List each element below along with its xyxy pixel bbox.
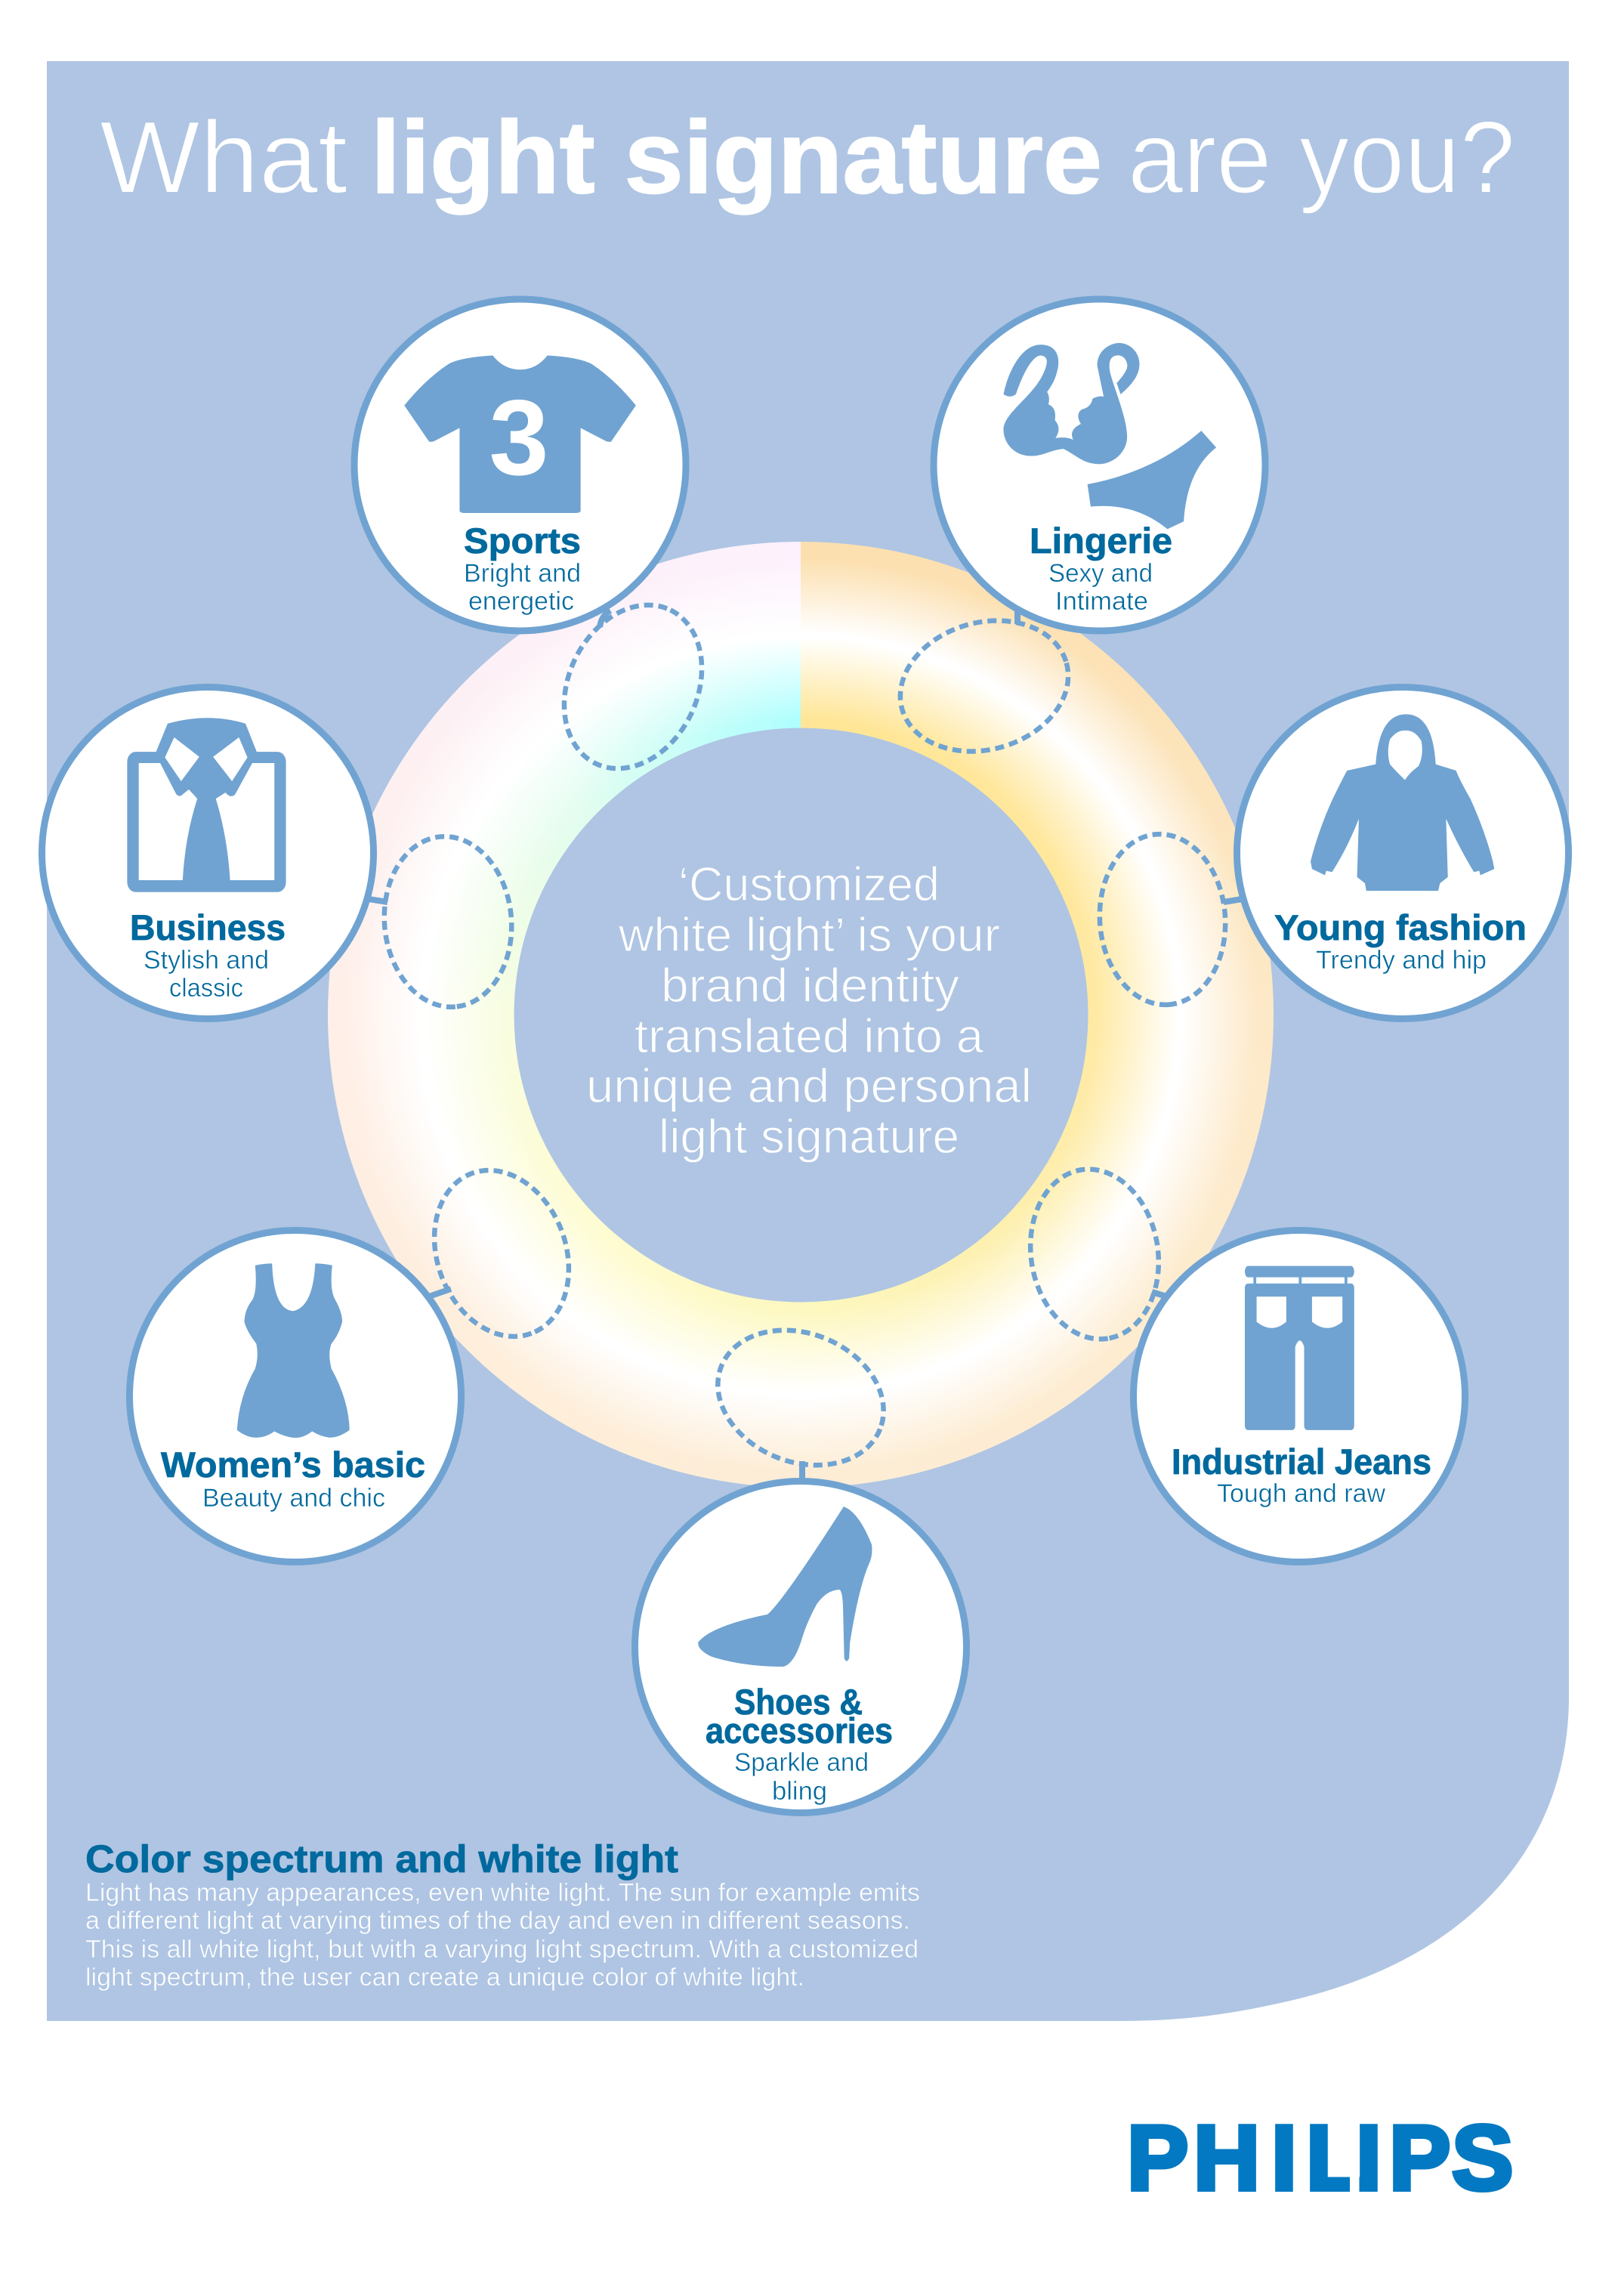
chart: spectrum ring <box>328 542 1274 1485</box>
label: industrial jeans: Industrial Jeans <box>1172 1442 1431 1482</box>
label: business: classic <box>169 974 243 1003</box>
ring centre hole <box>514 728 1088 1303</box>
label: young fashion <box>1274 907 1527 975</box>
label: shoes and accessories: accessories <box>706 1710 893 1751</box>
panel: shoes and accessories <box>635 1481 967 1813</box>
label: shoes and accessories: bling <box>772 1777 827 1806</box>
icon: jeans <box>1245 1266 1354 1430</box>
icon: hoodie <box>1311 714 1494 891</box>
label: shoes and accessories: Shoes & <box>734 1682 863 1722</box>
panel: industrial jeans <box>1133 1230 1465 1562</box>
text block: color spectrum and white light: Color spectrum and white light <box>85 1837 678 1880</box>
title <box>100 100 1515 215</box>
text block: color spectrum and white light <box>85 1837 920 1991</box>
centre statement: unique and personal <box>586 1060 1032 1113</box>
label: lingerie: Intimate <box>1055 587 1148 616</box>
label: young fashion: Trendy and hip <box>1316 946 1487 975</box>
label: business: Business <box>130 907 286 947</box>
centre statement: translated into a <box>635 1010 984 1063</box>
panel: business <box>42 688 373 1018</box>
label: sports: Sports <box>464 521 581 561</box>
text block: color spectrum and white light: This is all white light, but with a varying light spectrum. With a customized <box>85 1935 919 1963</box>
centre statement: white light’ is your <box>618 909 1000 962</box>
label: lingerie: Sexy and <box>1048 559 1153 588</box>
label: shoes and accessories <box>706 1682 893 1806</box>
icon: shirt and tie <box>127 718 286 892</box>
centre statement <box>586 858 1032 1163</box>
label: sports <box>464 521 581 616</box>
icon: lingerie <box>1003 343 1216 529</box>
dashed zones on the ring <box>377 582 1231 1489</box>
text block: color spectrum and white light: a different light at varying times of the day and even in different seasons. <box>85 1906 910 1934</box>
panel: sports <box>354 299 686 631</box>
centre statement: light signature <box>659 1111 959 1163</box>
connectors between circles and zones <box>369 610 1242 1479</box>
label: women's basic: Women’s basic <box>161 1445 425 1485</box>
label: lingerie <box>1030 521 1172 616</box>
label: business: Stylish and <box>144 946 269 975</box>
label: business <box>130 907 286 1003</box>
text block: color spectrum and white light: light spectrum, the user can create a unique color of white light. <box>85 1963 804 1991</box>
label: sports: Bright and <box>464 559 581 588</box>
label: industrial jeans: Tough and raw <box>1217 1479 1385 1508</box>
icon: dress <box>237 1263 350 1438</box>
label: women's basic <box>161 1445 425 1513</box>
label: lingerie: Lingerie <box>1030 521 1172 561</box>
panel: lingerie <box>934 299 1265 631</box>
centre statement: brand identity <box>661 959 960 1012</box>
centre statement: ‘Customized <box>678 858 940 911</box>
title: are you? <box>1128 100 1515 215</box>
title: What <box>100 100 347 215</box>
panel: women's basic <box>130 1230 461 1562</box>
label: young fashion: Young fashion <box>1274 907 1527 947</box>
label: women's basic: Beauty and chic <box>202 1484 385 1513</box>
logo: Philips: PHILIPS <box>1127 2106 1513 2209</box>
label: industrial jeans <box>1172 1442 1431 1508</box>
icon: high heel <box>698 1506 872 1667</box>
panel: young fashion <box>1237 688 1568 1018</box>
icon: t-shirt <box>404 356 636 513</box>
title: light signature <box>371 100 1102 215</box>
label: shoes and accessories: Sparkle and <box>734 1748 869 1777</box>
text block: color spectrum and white light: Light has many appearances, even white light. The sun for example emits <box>85 1878 920 1906</box>
label: sports: energetic <box>468 587 574 616</box>
number on t-shirt: 3 <box>489 378 548 498</box>
